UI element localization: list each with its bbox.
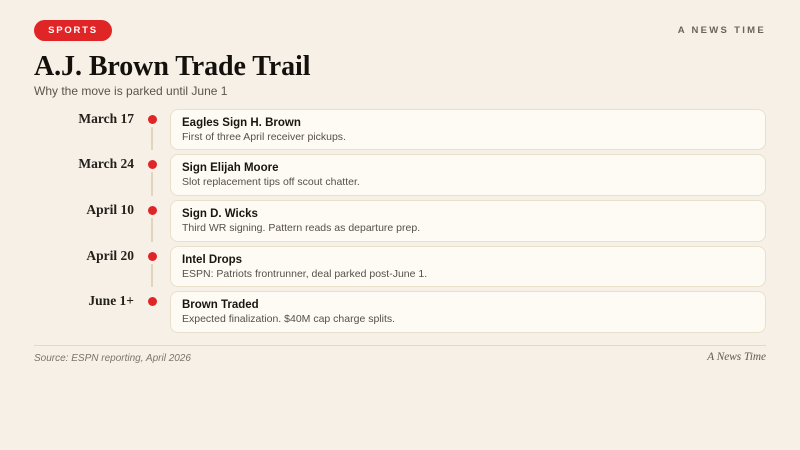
connector	[151, 172, 153, 196]
marker	[148, 115, 157, 124]
card title: Brown Traded	[182, 299, 259, 311]
marker	[148, 297, 157, 306]
date: March 17	[78, 111, 134, 126]
card title: Eagles Sign H. Brown	[182, 117, 301, 129]
event: March 24	[78, 154, 766, 196]
connector	[151, 127, 153, 150]
card	[170, 154, 766, 196]
card title: Sign Elijah Moore	[182, 162, 278, 174]
title: A.J. Brown Trade Trail	[34, 51, 310, 82]
marker	[148, 160, 157, 169]
card description: First of three April receiver pickups.	[182, 131, 346, 143]
card title: Sign D. Wicks	[182, 208, 258, 220]
card description: Third WR signing. Pattern reads as departure prep.	[182, 222, 420, 234]
brand label: A NEWS TIME	[678, 25, 766, 36]
card title: Intel Drops	[182, 254, 242, 266]
marker	[148, 252, 157, 261]
connector	[151, 264, 153, 287]
date: April 10	[86, 202, 134, 217]
card description: Slot replacement tips off scout chatter.	[182, 176, 360, 188]
event: April 20	[86, 246, 766, 287]
subtitle: Why the move is parked until June 1	[34, 84, 227, 98]
marker	[148, 206, 157, 215]
event: June 1+	[88, 291, 766, 333]
card	[170, 246, 766, 287]
card	[170, 200, 766, 242]
connector	[151, 218, 153, 242]
footer brand: A News Time	[707, 351, 766, 363]
badge: sports	[34, 20, 112, 41]
date: June 1+	[88, 293, 134, 308]
date: April 20	[86, 248, 134, 263]
event: April 10	[86, 200, 766, 242]
card description: ESPN: Patriots frontrunner, deal parked post-June 1.	[182, 268, 427, 280]
card	[170, 291, 766, 333]
event: March 17	[78, 109, 766, 150]
source note: Source: ESPN reporting, April 2026	[34, 353, 191, 364]
badge: sports: SPORTS	[48, 25, 98, 36]
card	[170, 109, 766, 150]
card description: Expected finalization. $40M cap charge splits.	[182, 313, 395, 325]
date: March 24	[78, 156, 134, 171]
